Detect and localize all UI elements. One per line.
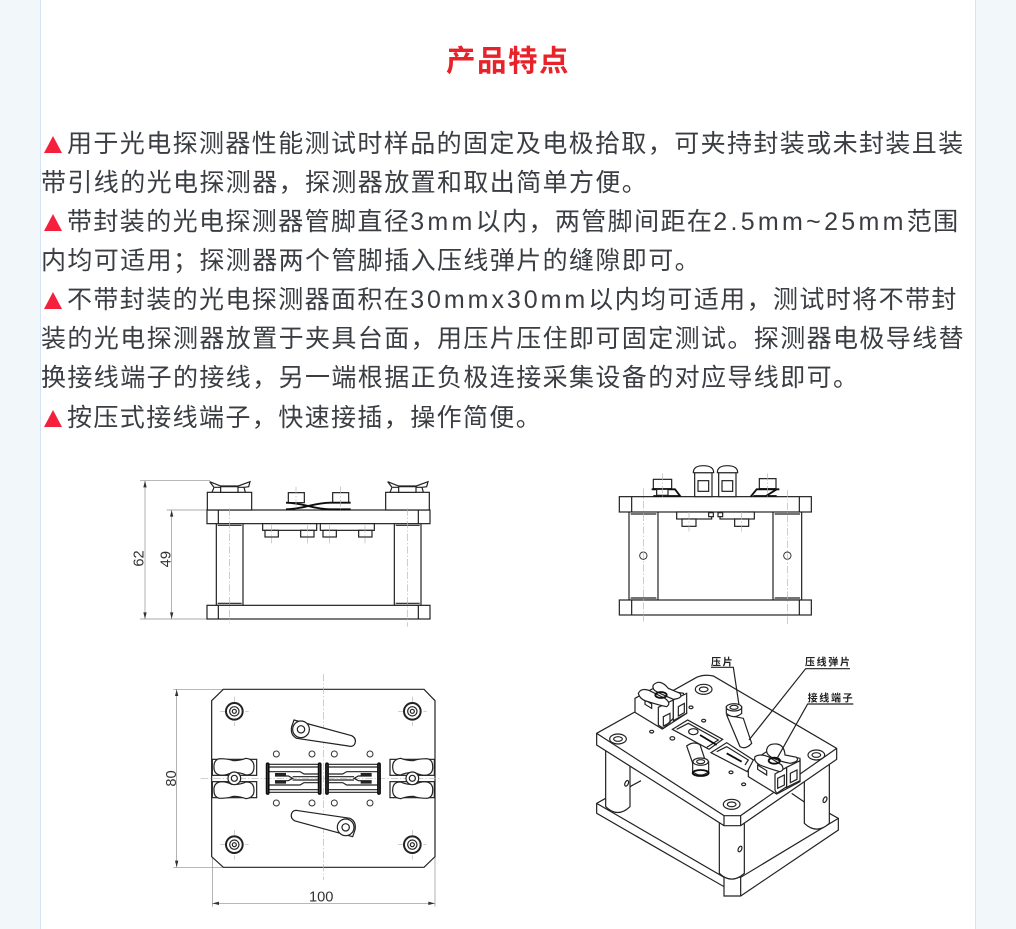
dimension 49: 49 — [158, 551, 174, 567]
drawing: side view — [619, 466, 811, 626]
text block: feature 3 — [41, 286, 965, 392]
text block: feature 3: 换接线端子的接线，另一端根据正负极连接采集设备的对应导线即可。 — [41, 364, 859, 392]
text block: feature 1: 带引线的光电探测器，探测器放置和取出简单方便。 — [41, 169, 648, 197]
text block: feature 2: 带封装的光电探测器管脚直径3mm以内，两管脚间距在2.5mm~25mm范围 — [67, 208, 960, 236]
callout: 压线弹片 — [749, 655, 852, 740]
text block: feature 1: 用于光电探测器性能测试时样品的固定及电极拾取，可夹持封装或未封装且装 — [67, 130, 965, 158]
text block: feature 2: 内均可适用；探测器两个管脚插入压线弹片的缝隙即可。 — [41, 247, 701, 275]
drawing: front view with dimensions 62 and 49 — [132, 481, 430, 627]
bullet triangle — [44, 292, 62, 309]
bullet triangle — [44, 214, 62, 231]
dimension 100: 100 — [309, 890, 333, 906]
dimension 80: 80 — [164, 770, 180, 787]
drawing: isometric view with callouts — [597, 655, 854, 896]
bullet triangle — [44, 410, 62, 427]
text block: feature 4: 按压式接线端子，快速接插，操作简便。 — [67, 404, 542, 432]
drawing: top view with dimensions 80 and 100 — [164, 674, 441, 907]
text block: feature 3: 不带封装的光电探测器面积在30mmx30mm以内均可适用，测试时将不带封 — [67, 286, 958, 314]
bullet triangle — [44, 136, 62, 153]
text block: feature 1 — [41, 130, 965, 197]
callout: 接线端子 — [778, 692, 854, 757]
callout: 压片 — [711, 655, 739, 705]
title: 产品特点 — [446, 45, 570, 78]
callout: 接线端子: 接线端子 — [808, 692, 854, 705]
text block: feature 3: 装的光电探测器放置于夹具台面，用压片压住即可固定测试。探测器电极导线替 — [41, 325, 965, 353]
callout: 压片: 压片 — [711, 655, 734, 668]
text block: feature 2 — [41, 208, 960, 275]
callout: 压线弹片: 压线弹片 — [805, 655, 852, 668]
dimension 62: 62 — [132, 550, 148, 567]
